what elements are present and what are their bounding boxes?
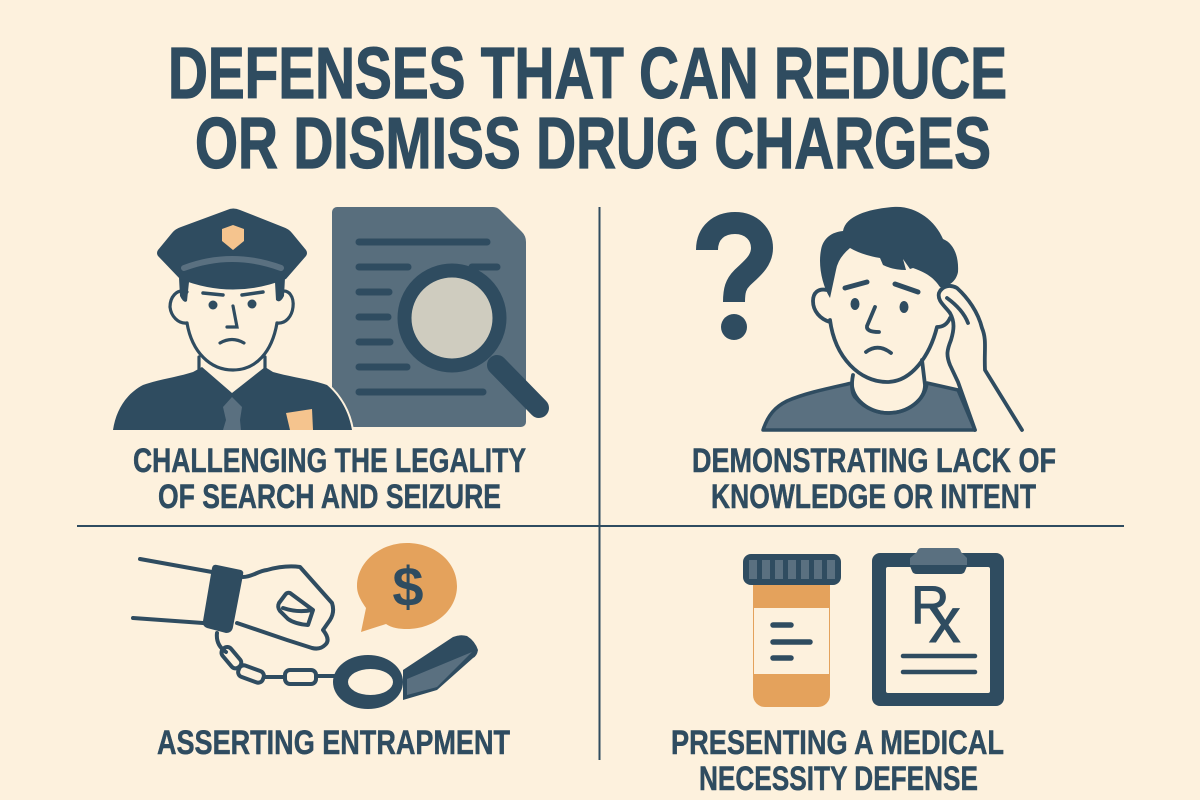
panel: entrapment [133, 543, 510, 762]
icon: pill bottle [743, 554, 841, 707]
label: medical necessity: PRESENTING A MEDICAL [671, 724, 1004, 762]
label: search and seizure: OF SEARCH AND SEIZURE [158, 478, 501, 516]
icon: handcuffed hand [133, 559, 478, 709]
icon: prescription clipboard: x [929, 586, 960, 656]
label: medical necessity [671, 724, 1004, 798]
label: lack of knowledge: DEMONSTRATING LACK OF [692, 442, 1056, 480]
label: lack of knowledge: KNOWLEDGE OR INTENT [711, 478, 1036, 516]
label: search and seizure: CHALLENGING THE LEGALITY [133, 442, 526, 480]
icon: document with magnifying glass [332, 207, 539, 427]
icon: prescription clipboard: R [911, 576, 949, 635]
icon: prescription clipboard [872, 548, 1004, 706]
icon: police officer [113, 208, 352, 430]
label: search and seizure [133, 442, 526, 516]
label: medical necessity: NECESSITY DEFENSE [699, 760, 978, 798]
label: lack of knowledge [692, 442, 1056, 516]
icon: speech bubble with dollar [357, 543, 457, 632]
icon: speech bubble with dollar: $ [392, 555, 424, 618]
icon: question mark [707, 223, 762, 340]
title [168, 34, 1007, 184]
panel: search and seizure [113, 207, 539, 516]
label: entrapment: ASSERTING ENTRAPMENT [157, 724, 510, 762]
panel: medical necessity [671, 548, 1004, 798]
panel: lack of knowledge [692, 207, 1056, 516]
icon: confused person [763, 207, 1022, 430]
